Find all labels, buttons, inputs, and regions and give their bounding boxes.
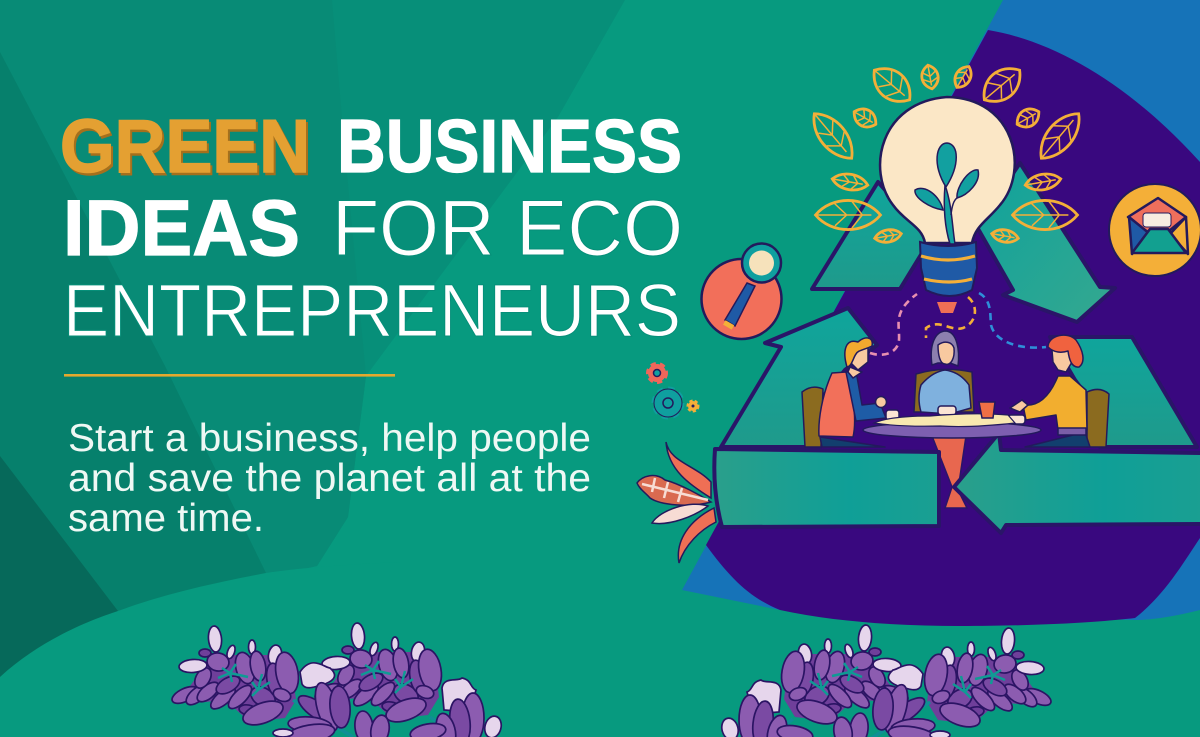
icon: magnifying glass badge [702,244,782,339]
gold leaves [805,60,1088,244]
person: man left [802,338,899,447]
dashed thought lines [870,293,1046,355]
subtitle text: and save the planet all at the [68,457,591,500]
arrow: top right [977,163,1115,322]
title divider [64,374,395,377]
bulb sprout [915,143,978,244]
title word: ENTREPRENEURS: ENTREPRENEURS [63,269,681,352]
title words: FOR ECO: FOR ECO [332,183,683,272]
tropical leaves [637,442,716,563]
arrow: bottom left bar [714,449,939,527]
title word: BUSINESS: BUSINESS [337,104,682,188]
bulb glass [880,97,1015,243]
bulb base stripes [921,256,975,282]
envelope [1128,198,1188,254]
title word: GREEN: GREEN [60,104,310,188]
magnifier glass [749,250,774,276]
subtitle text: Start a business, help people [68,417,591,460]
arrow: bottom right [954,433,1200,533]
person: woman centre [914,331,974,415]
title word: IDEAS: IDEAS [63,183,300,272]
bulb tip [937,302,957,313]
lavender sprig right [719,624,1053,737]
table [802,331,1109,447]
person: woman right [1008,335,1109,447]
table cloth [874,414,1015,427]
title word: GREEN: GREEN [62,106,312,190]
magnifier lens [742,244,781,282]
table top [863,422,1041,438]
lavender sprig left [170,622,504,737]
recycling arrows [714,163,1200,533]
bulb base [920,242,977,296]
subtitle text: same time. [68,497,264,540]
magnifier handle [725,283,755,326]
blue backdrop [682,0,1200,620]
arrow: right [1050,337,1197,447]
icon: envelope badge [1109,184,1200,276]
plant pot [979,402,995,418]
icon: gears [648,364,698,417]
arrow: left [721,308,877,447]
subtitle text [68,417,591,540]
light bulb [880,97,1015,313]
magnifier handle end [723,320,734,330]
title [60,104,683,352]
purple blob [706,30,1200,626]
arrow: top left [812,182,930,289]
table pedestal [932,436,967,508]
